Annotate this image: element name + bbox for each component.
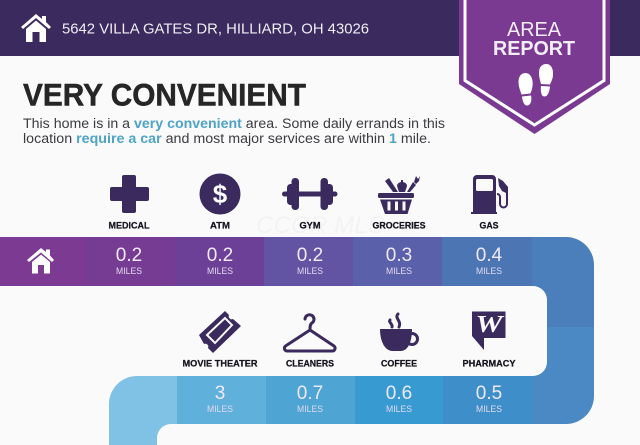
watermark: CCOR MLS: [256, 212, 384, 239]
stop: pharmacy: 0.5: [476, 383, 502, 404]
icon: gas pump: [471, 175, 508, 214]
badge: area report: REPORT: [493, 38, 575, 60]
stop: atm: 0.2: [207, 245, 233, 266]
icon: shopping basket: [378, 176, 420, 214]
stop: cleaners: [284, 315, 335, 415]
route path: distance bars: [0, 237, 594, 445]
stop: groceries: GROCERIES: [372, 220, 426, 230]
stop: medical: 0.2: [116, 245, 142, 266]
stop: cleaners: MILES: [297, 404, 323, 415]
stop: gym: MILES: [297, 266, 323, 277]
icon: dumbbell: [282, 178, 338, 210]
icon: footprints: [518, 64, 553, 106]
stop: atm: [200, 174, 240, 277]
description: [23, 116, 445, 146]
stop: pharmacy: PHARMACY: [462, 358, 516, 368]
header band: [0, 0, 640, 56]
icon: medical cross: [110, 175, 149, 213]
badge: area report: [459, 0, 610, 134]
left bend: [109, 376, 177, 445]
stop: coffee: COFFEE: [381, 358, 417, 368]
stop: movie theater: MOVIE THEATER: [182, 358, 258, 368]
stop: coffee: 0.6: [386, 383, 412, 404]
stop: groceries: [372, 176, 426, 277]
title: VERY CONVENIENT: [23, 76, 306, 112]
stop: pharmacy: [462, 312, 516, 415]
stop: movie theater: 3: [215, 383, 225, 404]
icon: home in bar: [27, 248, 54, 274]
description: This home is in a very convenient area. Some daily errands in this: [23, 116, 445, 131]
stop: coffee: MILES: [386, 404, 412, 415]
icon: coffee cup: [380, 314, 418, 351]
stop: gym: 0.2: [297, 245, 323, 266]
badge heading: AREA: [507, 19, 562, 41]
right bend: [532, 237, 594, 327]
stop: gym: GYM: [300, 220, 321, 230]
stop: gas: [471, 175, 508, 277]
stop: cleaners: CLEANERS: [286, 358, 334, 368]
stop: gas: 0.4: [476, 245, 503, 266]
stop: groceries: 0.3: [386, 245, 412, 266]
stop: atm: MILES: [207, 266, 233, 277]
icon: house: [21, 14, 51, 42]
stop: pharmacy: MILES: [476, 404, 502, 415]
icon: dollar coin: $: [213, 179, 228, 209]
stop: coffee: [380, 314, 418, 415]
top bar segments: [0, 237, 86, 286]
icon: ticket: [199, 311, 241, 353]
stop: medical: MEDICAL: [108, 220, 150, 230]
stop: cleaners: 0.7: [297, 383, 323, 404]
stop: gas: GAS: [480, 220, 498, 230]
description: location require a car and most major services are within 1 mile.: [23, 131, 431, 146]
icon: hanger: [284, 315, 335, 351]
stop: movie theater: MILES: [207, 404, 233, 415]
stop: groceries: MILES: [386, 266, 412, 277]
stop: gas: MILES: [476, 266, 502, 277]
address: 5642 VILLA GATES DR, HILLIARD, OH 43026: [62, 20, 369, 38]
stop: medical: [108, 175, 150, 277]
icon: pharmacy speech bubble: W: [476, 312, 505, 338]
stop: movie theater: [182, 311, 258, 415]
stop: gym: [282, 178, 338, 277]
stop: medical: MILES: [116, 266, 142, 277]
bottom bar segments: [443, 376, 532, 424]
stop: atm: ATM: [210, 220, 230, 230]
